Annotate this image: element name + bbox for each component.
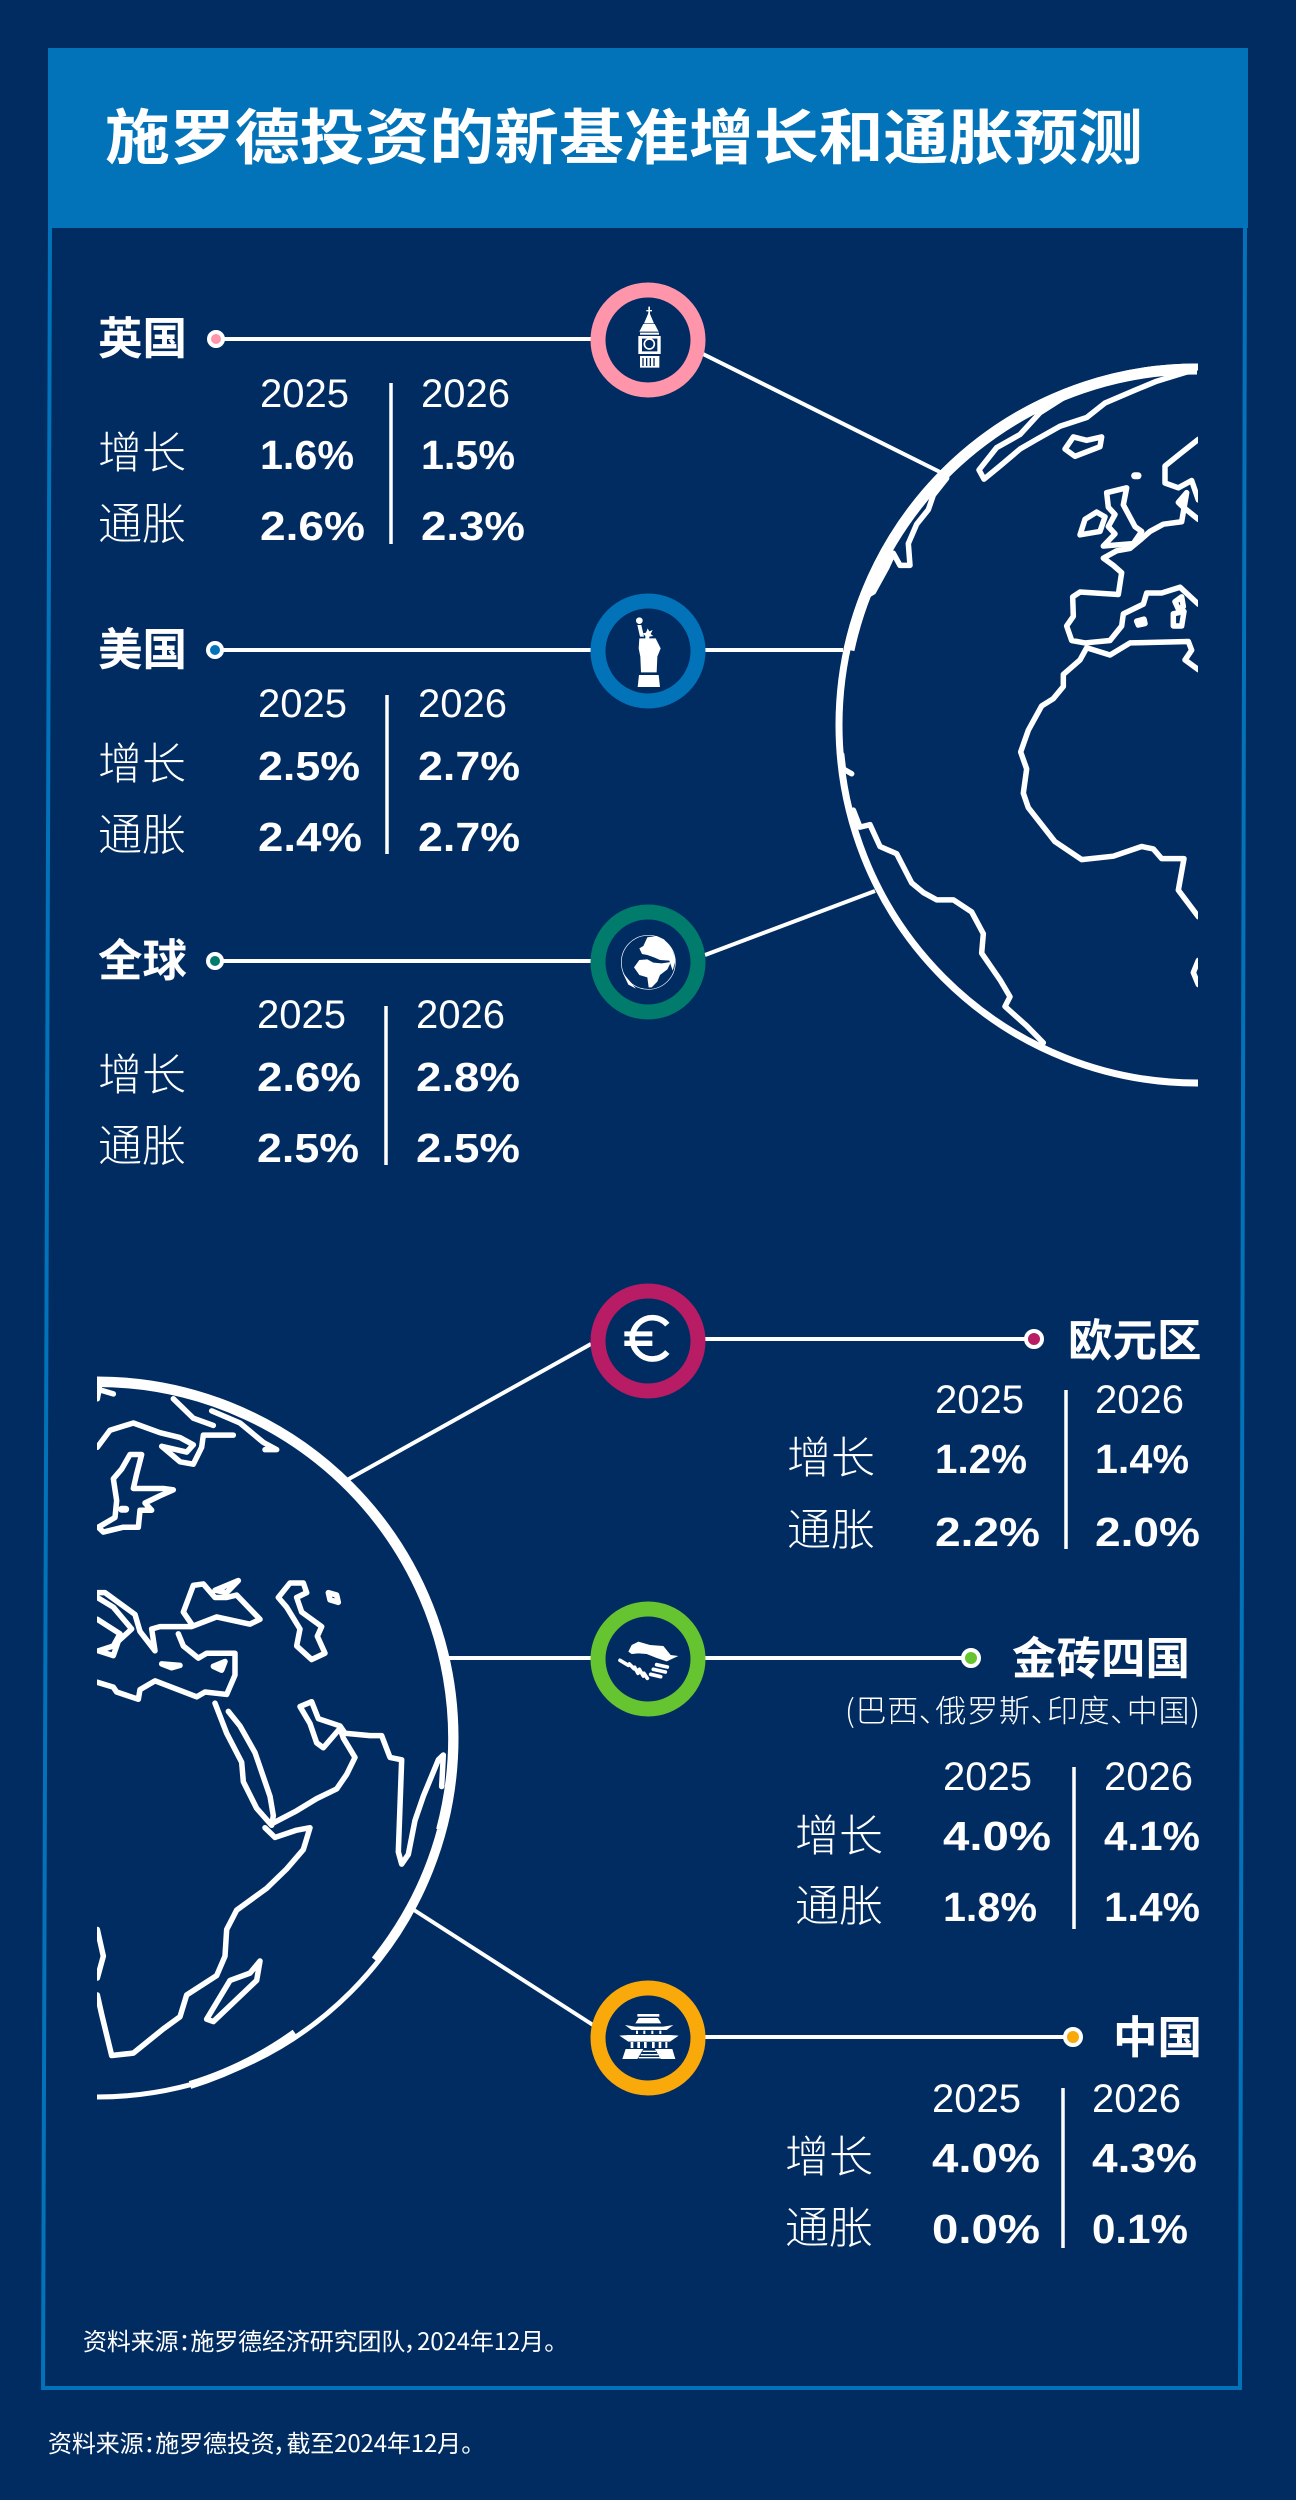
table China: 4.3%	[1092, 2135, 1197, 2181]
heading China: 中国	[1113, 2001, 1202, 2066]
panel: Eurozone	[347, 1291, 1202, 1558]
table Eurozone: 增长	[787, 1422, 875, 1486]
table China	[785, 2077, 1197, 2256]
subheading BRICs members: (巴西、俄罗斯、印度、中国)	[845, 1686, 1200, 1731]
table Global: 2.6%	[257, 1054, 361, 1100]
table US: 通胀	[98, 799, 186, 863]
table Eurozone: 2026	[1095, 1378, 1184, 1422]
table Eurozone: 2025	[935, 1378, 1024, 1422]
table China: 0.1%	[1092, 2206, 1188, 2252]
panel: US	[98, 601, 843, 863]
title bar	[48, 48, 1248, 228]
table BRICs: 4.1%	[1104, 1813, 1200, 1859]
US dot	[208, 643, 222, 657]
icon: temple	[619, 2014, 679, 2059]
table UK: 2.6%	[260, 503, 365, 549]
table US: 2.4%	[258, 814, 362, 860]
globe: Atlantic view, upper right	[836, 364, 1198, 1086]
table BRICs: 1.4%	[1104, 1884, 1200, 1930]
icon: globe	[621, 935, 676, 989]
table BRICs: 通胀	[795, 1870, 883, 1934]
heading Global: 全球	[98, 924, 187, 989]
table Global: 增长	[98, 1039, 186, 1103]
table BRICs: 增长	[795, 1800, 883, 1864]
connector lines Global	[215, 891, 875, 961]
table BRICs: 2025	[943, 1755, 1032, 1799]
table Eurozone	[787, 1378, 1200, 1558]
panel: China	[414, 1910, 1202, 2256]
table BRICs: 1.8%	[943, 1884, 1037, 1930]
table UK: 2026	[421, 372, 510, 416]
table BRICs: 2026	[1104, 1755, 1193, 1799]
table Global: 2.8%	[416, 1054, 520, 1100]
icon: euro	[624, 1318, 667, 1359]
table UK: 2.3%	[421, 503, 525, 549]
table China: 2025	[932, 2077, 1021, 2121]
table Eurozone: 2.0%	[1095, 1509, 1200, 1555]
table China: 4.0%	[932, 2135, 1040, 2181]
table US: 2026	[418, 682, 507, 726]
US icon ring	[598, 601, 698, 701]
UK icon ring	[598, 290, 698, 390]
BRICs dot	[963, 1650, 979, 1666]
table Eurozone: 1.2%	[935, 1436, 1027, 1482]
China dot	[1065, 2029, 1081, 2045]
table UK: 1.5%	[421, 432, 515, 478]
table Eurozone: 通胀	[787, 1494, 875, 1558]
connector lines BRICs	[447, 1656, 971, 1660]
Global icon ring	[598, 912, 698, 1012]
heading Eurozone: 欧元区	[1068, 1304, 1202, 1369]
table UK	[98, 372, 525, 552]
icon: handshake	[620, 1642, 678, 1678]
icon: Statue of Liberty	[636, 617, 661, 687]
China icon ring	[598, 1988, 698, 2088]
connector lines China	[414, 1910, 1073, 2037]
table UK: 2025	[260, 372, 349, 416]
table UK: 1.6%	[260, 432, 354, 478]
table US: 2025	[258, 682, 347, 726]
table Global: 2.5%	[257, 1125, 359, 1171]
table Global: 2025	[257, 993, 346, 1037]
UK dot	[209, 332, 223, 346]
table UK: 增长	[98, 417, 186, 481]
BRICs icon ring	[598, 1609, 698, 1709]
panel: BRICs	[447, 1609, 1200, 1934]
table US: 2.5%	[258, 743, 360, 789]
table Global: 2.5%	[416, 1125, 520, 1171]
table Eurozone: 2.2%	[935, 1509, 1040, 1555]
table China: 增长	[785, 2121, 873, 2185]
connector lines US	[215, 648, 843, 652]
table US	[98, 682, 520, 863]
table UK: 通胀	[98, 488, 186, 552]
source note inside panel: 资料来源：施罗德经济研究团队，2024年12月。	[83, 2322, 556, 2357]
Eurozone icon ring	[598, 1291, 698, 1391]
table Eurozone: 1.4%	[1095, 1436, 1189, 1482]
connector lines Eurozone	[347, 1339, 1034, 1480]
table US: 2.7%	[418, 814, 520, 860]
table US: 增长	[98, 728, 186, 792]
icon: Big Ben	[638, 307, 661, 368]
heading BRICs: 金砖四国	[1012, 1622, 1190, 1687]
table China: 0.0%	[932, 2206, 1040, 2252]
table Global: 通胀	[98, 1110, 186, 1174]
table China: 2026	[1092, 2077, 1181, 2121]
table BRICs: 4.0%	[943, 1813, 1051, 1859]
table Global: 2026	[416, 993, 505, 1037]
source note below panel: 资料来源：施罗德投资，截至2024年12月。	[48, 2424, 473, 2459]
globe: Eurasia view, lower left	[97, 1376, 458, 2100]
title: 施罗德投资的新基准增长和通胀预测	[105, 90, 1143, 177]
connector lines UK	[216, 339, 940, 472]
heading US: 美国	[98, 613, 187, 678]
table Global	[98, 993, 520, 1174]
table China: 通胀	[785, 2192, 873, 2256]
Eurozone dot	[1026, 1331, 1042, 1347]
panel: UK	[98, 290, 940, 552]
panel: Global	[98, 891, 875, 1174]
heading UK: 英国	[98, 302, 187, 367]
table US: 2.7%	[418, 743, 520, 789]
table BRICs	[795, 1755, 1200, 1934]
Global dot	[208, 954, 222, 968]
